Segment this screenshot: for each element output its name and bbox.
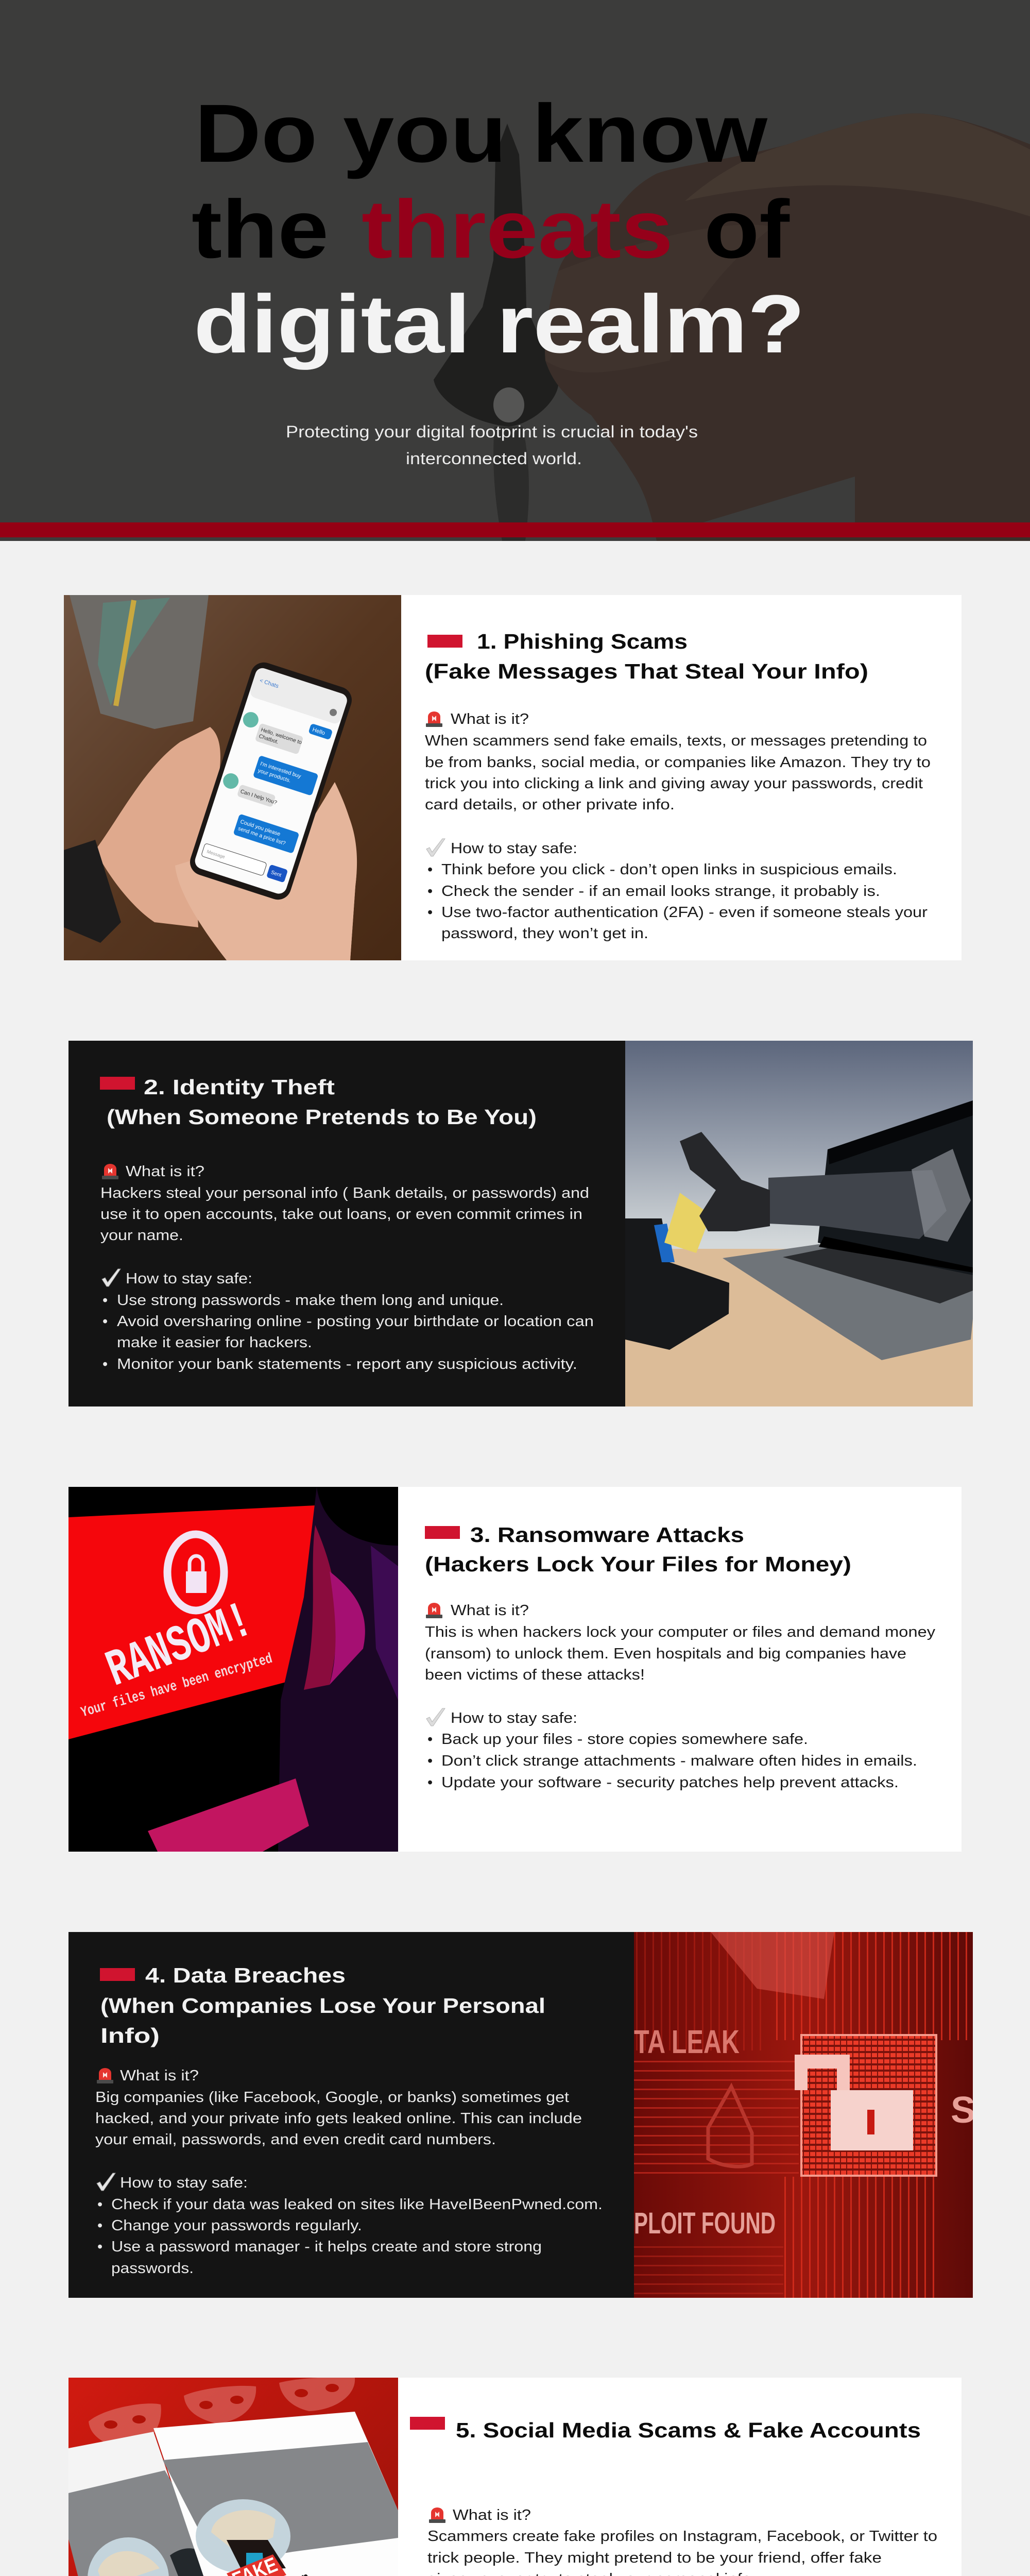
what is it — [425, 1602, 936, 1683]
how to stay safe: passwords. — [111, 2260, 194, 2277]
what is it — [100, 1163, 589, 1244]
title: Do you know — [195, 87, 768, 179]
subtitle — [286, 422, 698, 468]
how to stay safe: How to stay safe: — [120, 2175, 248, 2191]
photo: hands holding phone with chat: Message — [206, 849, 226, 859]
how to stay safe: How to stay safe: — [126, 1270, 252, 1287]
how to stay safe — [102, 1269, 594, 1372]
how to stay safe: • — [427, 1731, 433, 1748]
title: digital realm? — [194, 278, 805, 370]
heading — [425, 1523, 851, 1576]
what is it: use it to open accounts, take out loans, or even commit crimes in — [100, 1206, 582, 1223]
what is it: your name. — [100, 1227, 183, 1244]
what is it: Hackers steal your personal info ( Bank details, or passwords) and — [100, 1185, 589, 1201]
heading: 4. Data Breaches — [145, 1963, 346, 1987]
how to stay safe: Avoid oversharing online - posting your birthdate or location can — [117, 1313, 594, 1330]
photo: hands holding phone with chat: your products. — [257, 768, 291, 784]
what is it — [425, 711, 931, 813]
how to stay safe: Use strong passwords - make them long and unique. — [117, 1292, 504, 1309]
how to stay safe: • — [102, 1356, 108, 1372]
how to stay safe: • — [427, 1774, 433, 1791]
title: the — [192, 183, 329, 275]
panel: 1 phishing scams — [64, 595, 962, 960]
what is it: What is it? — [120, 2067, 199, 2084]
panel: 4 data breaches — [68, 1932, 975, 2298]
how to stay safe: • — [97, 2239, 102, 2255]
title — [192, 87, 805, 370]
photo: ransom message on red screen — [68, 1487, 398, 1852]
what is it: This is when hackers lock your computer or files and demand money — [425, 1624, 936, 1640]
heading: 3. Ransomware Attacks — [470, 1523, 744, 1547]
photo: ransom message on red screen: Your files have been encrypted — [79, 1651, 274, 1721]
photo: red circuit board with open padlock: S — [951, 2090, 975, 2131]
what is it: (ransom) to unlock them. Even hospitals and big companies have — [425, 1646, 906, 1662]
photo: hands holding phone with chat: send me a price list? — [237, 825, 286, 846]
photo: hands holding phone with chat: Sent — [270, 870, 282, 878]
what is it: What is it? — [453, 2507, 531, 2523]
title: of — [704, 183, 790, 275]
heading: 1. Phishing Scams — [477, 630, 688, 653]
how to stay safe: Use a password manager - it helps create and store strong — [111, 2239, 542, 2255]
how to stay safe: Check the sender - if an email looks strange, it probably is. — [441, 883, 880, 900]
photo: hands holding phone with chat: Chatbot. — [258, 733, 279, 745]
how to stay safe: How to stay safe: — [451, 1710, 577, 1726]
subtitle: interconnected world. — [406, 449, 582, 468]
how to stay safe: • — [97, 2196, 102, 2213]
how to stay safe: Use two-factor authentication (2FA) - even if someone steals your — [441, 904, 928, 921]
how to stay safe: Back up your files - store copies somewhere safe. — [441, 1731, 808, 1748]
heading: Info) — [100, 2024, 160, 2047]
heading: 2. Identity Theft — [144, 1075, 335, 1099]
how to stay safe: • — [97, 2217, 102, 2234]
what is it: What is it? — [451, 711, 529, 727]
photo: hands holding phone with chat: Can I help You? — [239, 788, 278, 806]
how to stay safe: Update your software - security patches help prevent attacks. — [441, 1774, 899, 1791]
photo: fake social profiles on red background — [68, 2378, 398, 2576]
heading: (When Someone Pretends to Be You) — [107, 1105, 537, 1129]
heading: (Hackers Lock Your Files for Money) — [425, 1552, 851, 1576]
how to stay safe: • — [102, 1313, 108, 1330]
panel: 5 social media scams — [68, 2377, 962, 2576]
how to stay safe: Don’t click strange attachments - malware often hides in emails. — [441, 1753, 917, 1769]
what is it: be from banks, social media, or companies like Amazon. They try to — [425, 754, 931, 771]
photo: hands holding phone with chat — [64, 595, 401, 960]
how to stay safe: • — [102, 1292, 108, 1309]
photo: hands holding phone with chat: Hello, welcome to — [260, 727, 303, 746]
photo: red circuit board with open padlock: PLOIT FOUND — [634, 2207, 776, 2240]
what is it: your email, passwords, and even credit card numbers. — [95, 2131, 496, 2148]
how to stay safe: How to stay safe: — [451, 840, 577, 857]
photo: red circuit board with open padlock: TA LEAK — [634, 2023, 740, 2060]
photo: hands holding phone with chat: Hello — [312, 726, 326, 737]
photo: hands holding phone with chat: < Chats — [259, 677, 280, 689]
subtitle: Protecting your digital footprint is crucial in today's — [286, 422, 698, 441]
what is it: Scammers create fake profiles on Instagram, Facebook, or Twitter to — [427, 2528, 937, 2545]
what is it — [427, 2507, 937, 2576]
what is it: hacked, and your private info gets leaked online. This can include — [95, 2110, 582, 2127]
panel: 3 ransomware attacks — [68, 1487, 962, 1852]
heading: (Fake Messages That Steal Your Info) — [425, 659, 868, 683]
photo: red circuit board with open padlock — [634, 1932, 975, 2298]
what is it: trick people. They might pretend to be your friend, offer fake — [427, 2550, 882, 2566]
what is it: been victims of these attacks! — [425, 1667, 645, 1683]
heading: 5. Social Media Scams & Fake Accounts — [456, 2418, 921, 2442]
what is it: trick you into clicking a link and giving away your passwords, credit — [425, 775, 923, 792]
how to stay safe — [426, 839, 928, 942]
how to stay safe: password, they won’t get in. — [441, 925, 648, 942]
heading — [100, 1963, 545, 2047]
heading: (When Companies Lose Your Personal — [100, 1994, 545, 2018]
how to stay safe: Change your passwords regularly. — [111, 2217, 362, 2234]
photo: gloved hand reaching from laptop — [625, 1041, 973, 1406]
what is it — [95, 2067, 582, 2148]
how to stay safe — [426, 1708, 917, 1791]
how to stay safe: • — [427, 904, 433, 921]
panel: hero header — [0, 0, 1030, 541]
hero background photo: hand holding key — [0, 0, 1030, 541]
what is it: card details, or other private info. — [425, 796, 675, 813]
red band — [0, 522, 1030, 537]
what is it: What is it? — [451, 1602, 529, 1619]
how to stay safe: make it easier for hackers. — [117, 1334, 312, 1351]
photo: hands holding phone with chat: Could you please — [239, 819, 281, 837]
what is it: Big companies (like Facebook, Google, or banks) sometimes get — [95, 2089, 569, 2106]
heading — [100, 1075, 537, 1129]
how to stay safe: Check if your data was leaked on sites like HaveIBeenPwned.com. — [111, 2196, 603, 2213]
heading — [425, 630, 868, 683]
how to stay safe: Monitor your bank statements - report any suspicious activity. — [117, 1356, 577, 1372]
photo: ransom message on red screen: RANSOM! — [99, 1592, 261, 1701]
how to stay safe: • — [427, 883, 433, 900]
title: threats — [362, 183, 673, 275]
what is it: What is it? — [126, 1163, 204, 1180]
how to stay safe: • — [427, 1753, 433, 1769]
what is it: When scammers send fake emails, texts, or messages pretending to — [425, 733, 927, 749]
panel: 2 identity theft — [68, 1041, 973, 1406]
photo: hands holding phone with chat: I'm interested buy — [260, 760, 302, 779]
how to stay safe: • — [427, 861, 433, 878]
how to stay safe: Think before you click - don’t open links in suspicious emails. — [441, 861, 897, 878]
how to stay safe — [97, 2173, 603, 2277]
